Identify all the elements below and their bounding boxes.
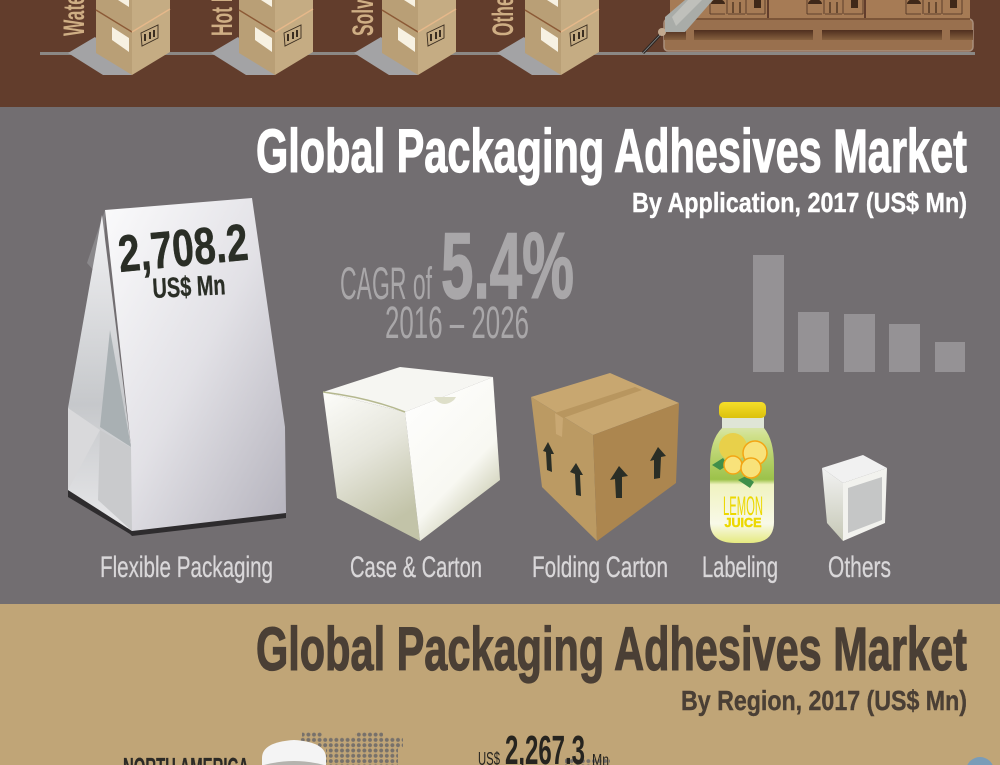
icon: box stack 3 (354, 0, 456, 75)
icon: lemon juice bottle (710, 402, 774, 543)
value: north america market (478, 727, 609, 765)
icon: folding carton box (531, 373, 679, 541)
callout: CAGR: 5.4% (441, 213, 574, 318)
icon: north america container (262, 740, 326, 765)
value: flexible packaging (116, 214, 251, 304)
value: flexible packaging: US$ Mn (152, 269, 226, 304)
icon: blue marker (966, 757, 994, 765)
icon: box stack 4 (497, 0, 599, 75)
label: folding carton: Folding Carton (532, 551, 668, 584)
panel: adhesive types (brown band) (0, 0, 1000, 107)
panel: by region (tan band) (0, 604, 1000, 765)
icon: flexible packaging bag (68, 198, 286, 536)
label: others: Others (828, 551, 891, 584)
icon: glue applicator (643, 0, 713, 53)
icon: others box (822, 455, 887, 541)
icon: box stack 2 (211, 0, 313, 75)
label: case and carton: Case & Carton (350, 551, 482, 584)
label: flexible packaging: Flexible Packaging (100, 551, 273, 584)
bottle label text: JUICE (724, 515, 762, 530)
bottle label text (723, 491, 763, 530)
icon: case and carton box (323, 367, 500, 541)
label: labeling: Labeling (702, 551, 778, 584)
value: flexible packaging: 2,708.2 (116, 214, 251, 284)
dotted world map (300, 732, 610, 765)
callout: CAGR (340, 213, 574, 348)
panel: by application (gray band) (0, 107, 1000, 604)
callout: CAGR: 2016 – 2026 (385, 297, 529, 348)
icon: pallet with cartons (664, 0, 973, 51)
icon: box stack 1 (68, 0, 170, 75)
callout: CAGR: CAGR of (340, 258, 432, 309)
bar chart (753, 255, 965, 372)
icon: lemon juice bottle: LEMON (723, 491, 763, 521)
